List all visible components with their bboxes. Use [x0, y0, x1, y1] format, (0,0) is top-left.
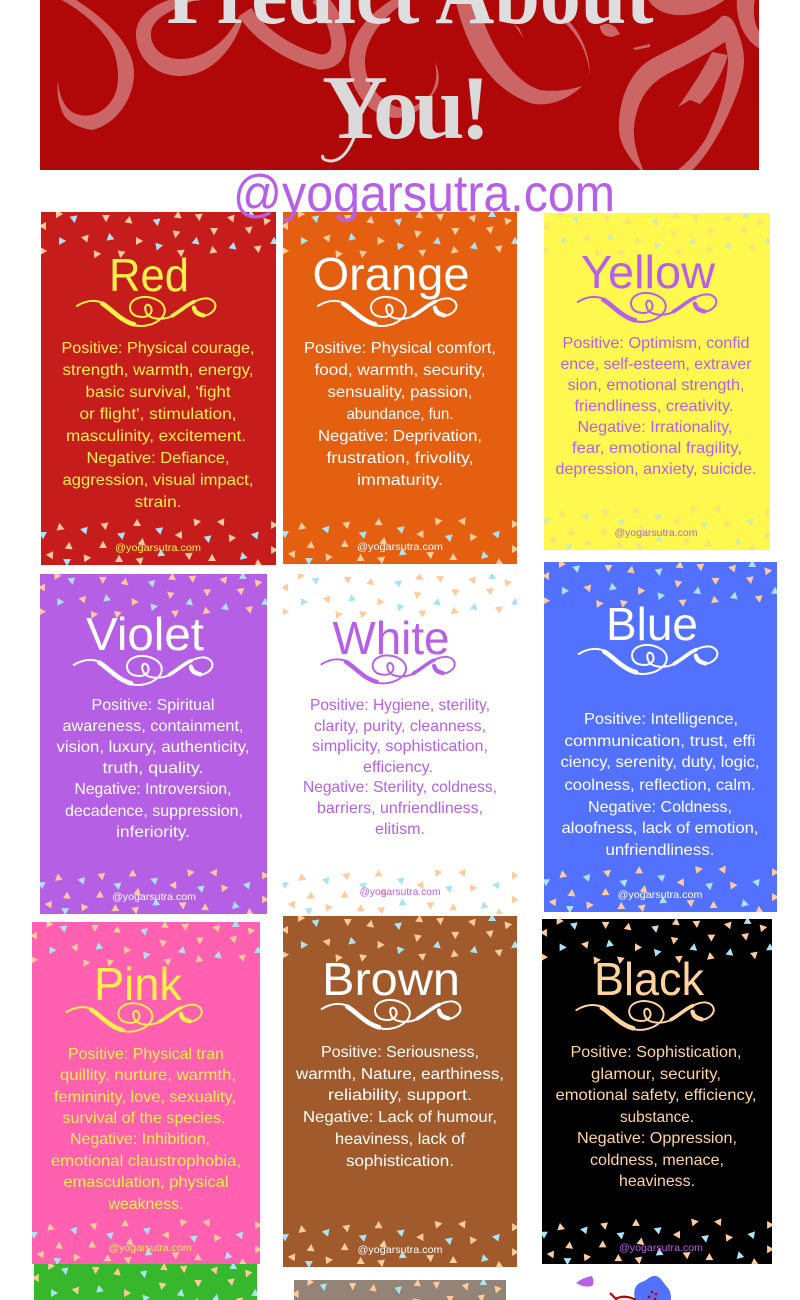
card: Blue: unfriendliness. — [606, 842, 714, 859]
card: Orange: Orange — [312, 248, 470, 300]
card: Violet: inferiority. — [116, 824, 190, 841]
card: Violet: awareness, containment, — [62, 718, 243, 735]
card: Black: coldness, menace, — [590, 1152, 724, 1169]
card: Black: substance. — [620, 1109, 694, 1126]
card: Brown: Positive: Seriousness, — [321, 1044, 479, 1061]
card: Pink: Negative: Inhibition, — [70, 1131, 210, 1148]
card: Brown: warmth, Nature, earthiness, — [295, 1066, 504, 1083]
card: Red — [39, 210, 278, 566]
card: Pink: @yogarsutra.com — [108, 1242, 192, 1254]
card: Red: @yogarsutra.com — [115, 542, 201, 554]
card: Brown: heaviness, lack of — [335, 1131, 466, 1148]
icon: cropped illustration blobs — [576, 1276, 671, 1300]
card: Pink: emasculation, physical — [64, 1174, 228, 1191]
card: Blue: aloofness, lack of emotion, — [562, 820, 758, 837]
card: Violet — [38, 572, 269, 915]
card: White: barriers, unfriendliness, — [317, 800, 483, 817]
card: Black: Black — [594, 953, 705, 1005]
card: Yellow: fear, emotional fragility, — [572, 440, 742, 457]
card: Orange: sensuality, passion, — [328, 384, 472, 401]
card: Yellow: Negative: Irrationality, — [578, 419, 732, 436]
card: Red: Red — [109, 249, 189, 301]
card: Yellow — [542, 211, 772, 551]
card: Orange: food, warmth, security, — [314, 362, 486, 379]
card: Red: Positive: Physical courage, — [62, 340, 254, 357]
card: Blue — [542, 560, 779, 913]
card: Yellow: friendliness, creativity. — [574, 398, 734, 415]
card: Orange: abundance, fun. — [346, 406, 454, 423]
card: Green (cropped) — [32, 1262, 259, 1300]
card: Orange: Negative: Deprivation, — [318, 428, 482, 445]
card: Orange: @yogarsutra.com — [357, 541, 443, 553]
card: Black: glamour, security, — [591, 1066, 721, 1083]
card: Brown: Negative: Lack of humour, — [303, 1109, 497, 1126]
card: Orange: Positive: Physical comfort, — [304, 340, 496, 357]
card: Violet: Violet — [86, 608, 204, 660]
card: Pink: emotional claustrophobia, — [51, 1153, 241, 1170]
card: Pink — [30, 920, 262, 1265]
card: Red: basic survival, 'fight — [86, 384, 231, 401]
card: Pink: quillity, nurture, warmth, — [60, 1067, 236, 1084]
card: Red: masculinity, excitement. — [66, 428, 246, 445]
card: Blue: Positive: Intelligence, — [584, 711, 738, 728]
card: Violet: Positive: Spiritual — [92, 697, 214, 714]
title text: Y — [322, 57, 388, 158]
title text: ou! — [373, 57, 486, 158]
card: Yellow: Yellow — [581, 246, 716, 298]
card: Red: Negative: Defiance, — [86, 450, 230, 467]
brush swirl decoration — [57, 0, 762, 172]
card: Brown: @yogarsutra.com — [358, 1244, 443, 1256]
card: White: Positive: Hygiene, sterility, — [310, 697, 490, 714]
card: Blue: Negative: Coldness, — [588, 799, 732, 816]
card: Brown: sophistication. — [346, 1153, 454, 1170]
card: Pink: survival of the species. — [62, 1110, 226, 1127]
card: Brown: Brown — [322, 953, 460, 1005]
card: Brown — [281, 914, 519, 1268]
card: Red: or flight', stimulation, — [80, 406, 236, 423]
card: White: elitism. — [375, 821, 425, 838]
card: Black: @yogarsutra.com — [619, 1242, 703, 1254]
card: Yellow: sion, emotional strength, — [568, 377, 744, 394]
card: White: Negative: Sterility, coldness, — [303, 779, 497, 796]
card: Orange: immaturity. — [357, 472, 443, 489]
card: Black: emotional safety, efficiency, — [556, 1087, 756, 1104]
card: Black — [540, 917, 774, 1265]
card: Violet: truth, quality. — [102, 760, 204, 777]
card: Violet: vision, luxury, authenticity, — [56, 739, 250, 756]
card: Pink: Pink — [94, 958, 183, 1010]
card: Red: strain. — [134, 494, 182, 511]
watermark heading: @yogarsutra.com — [233, 165, 615, 223]
card: Red: aggression, visual impact, — [62, 472, 253, 489]
card: Pink: femininity, love, sexuality, — [54, 1089, 236, 1106]
card: Yellow: depression, anxiety, suicide. — [556, 461, 756, 478]
card: Blue: ciency, serenity, duty, logic, — [560, 754, 760, 771]
card: White — [281, 572, 519, 915]
card: Black: Negative: Oppression, — [577, 1130, 737, 1147]
card: Black: Positive: Sophistication, — [570, 1044, 742, 1061]
card: Pink: weakness. — [108, 1196, 184, 1213]
card: Red: strength, warmth, energy, — [62, 362, 254, 379]
card: Orange: frustration, frivolity, — [326, 450, 474, 467]
card: Yellow: Positive: Optimism, confid — [562, 335, 750, 352]
card: Blue: Blue — [606, 598, 698, 650]
card: Blue: coolness, reflection, calm. — [564, 777, 756, 794]
card: White: simplicity, sophistication, — [312, 738, 488, 755]
card: Blue: communication, trust, effi — [564, 733, 756, 750]
card: Violet: Negative: Introversion, — [74, 781, 232, 798]
card: White: @yogarsutra.com — [360, 886, 441, 898]
card: Black: heaviness. — [619, 1173, 695, 1190]
card: Brown: reliability, support. — [328, 1087, 472, 1104]
card: Yellow: ence, self-esteem, extraver — [560, 356, 752, 373]
title text — [166, 0, 654, 161]
card: Violet: decadence, suppression, — [65, 803, 243, 820]
card: White: clarity, purity, cleanness, — [314, 718, 486, 735]
card: White: White — [332, 612, 450, 664]
card: Violet: @yogarsutra.com — [112, 891, 196, 903]
card: Orange — [281, 210, 519, 565]
header banner — [40, 0, 762, 172]
card: Blue: @yogarsutra.com — [618, 889, 703, 901]
card: Pink: Positive: Physical tran — [68, 1046, 224, 1063]
card: Grey (cropped) — [292, 1278, 508, 1300]
card: White: efficiency. — [363, 759, 433, 776]
card: Yellow: @yogarsutra.com — [614, 527, 698, 539]
